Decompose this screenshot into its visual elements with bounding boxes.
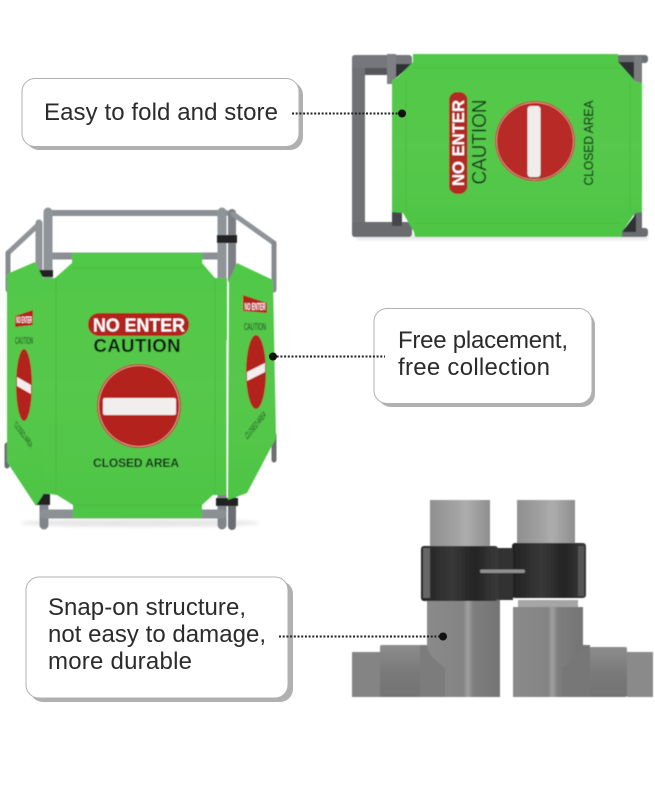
callout: easy to fold and store (22, 78, 303, 150)
left T joint (352, 598, 500, 697)
center no enter label: NO ENTER (93, 316, 185, 336)
connector: snap-on callout to clamp (279, 632, 447, 640)
photo: three-panel barrier: CAUTION (244, 321, 266, 333)
photo: three-panel barrier: CAUTION (15, 336, 33, 347)
center closed area label: CLOSED AREA (93, 456, 179, 470)
callout: snap-on structure: more durable (48, 648, 192, 675)
callout: free placement: Free placement, (398, 327, 568, 354)
center no entry sign (97, 364, 181, 448)
green fabric panel (392, 54, 642, 237)
black clips (36, 235, 238, 506)
photo: three-panel barrier: NO ENTER (244, 302, 266, 313)
left wing panel (7, 262, 43, 506)
left wing sign (13, 310, 34, 451)
photo: three-panel barrier: NO ENTER (16, 315, 32, 325)
connector: placement callout to barrier (269, 352, 385, 360)
center panel (43, 253, 227, 518)
photo: snap-on clamp detail (352, 500, 653, 697)
upper pipes (430, 500, 575, 550)
center caution label: CAUTION (94, 335, 180, 356)
closed area label: CLOSED AREA (582, 100, 596, 186)
caution label: CAUTION (469, 100, 491, 184)
no enter label: NO ENTER (450, 100, 468, 186)
no entry sign (495, 101, 575, 181)
connector: fold callout to folded barrier (292, 110, 406, 118)
right T joint (513, 600, 653, 697)
callout: free placement (374, 308, 595, 407)
callout: free placement: free collection (398, 354, 550, 381)
callout: easy to fold and store: Easy to fold and store (44, 99, 278, 126)
callout: snap-on structure (26, 577, 293, 702)
right wing sign: CLOSED AREA (244, 408, 267, 442)
callout: snap-on structure: Snap-on structure, (48, 594, 246, 621)
left wing sign: CLOSED AREA (13, 418, 34, 451)
right wing sign (243, 295, 267, 442)
black clamp (421, 543, 586, 601)
pipe frame (7, 212, 274, 526)
callout: snap-on structure: not easy to damage, (48, 621, 266, 648)
photo: three-panel barrier (7, 212, 276, 527)
photo: folded barrier (352, 54, 648, 240)
right wing panel (228, 263, 276, 500)
